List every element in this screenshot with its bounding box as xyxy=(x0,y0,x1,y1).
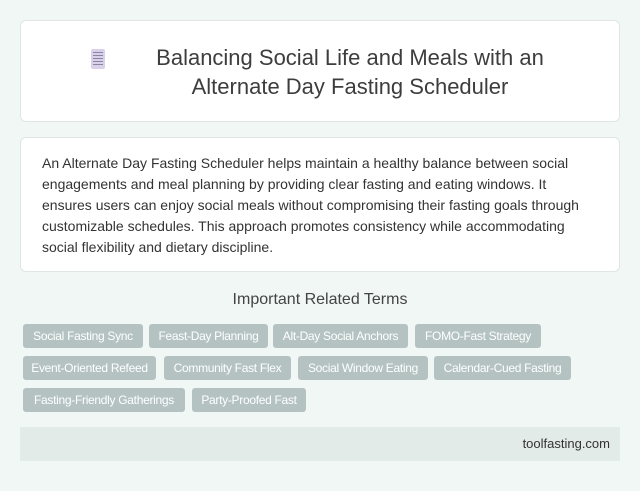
tags: Social Fasting Sync xyxy=(33,329,133,343)
icon: document xyxy=(91,49,105,69)
description panel xyxy=(20,137,620,272)
footer text: toolfasting.com xyxy=(523,436,610,451)
tags: Calendar-Cued Fasting xyxy=(444,361,561,375)
tags: Social Window Eating xyxy=(308,361,418,375)
tags: Feast-Day Planning xyxy=(158,329,258,343)
header panel xyxy=(20,20,620,122)
title: Balancing Social Life and Meals with an Alternate Day Fasting Scheduler xyxy=(156,45,544,99)
description text: An Alternate Day Fasting Scheduler helps maintain a healthy balance between social engagements and meal planning by providing clear fasting and eating windows. It ensures users can enjoy social meals without compromising their fasting goals through customizable schedules. This approach promotes consistency while accommodating social flexibility and dietary discipline. xyxy=(42,155,579,255)
footer xyxy=(20,427,620,461)
tags: Community Fast Flex xyxy=(174,361,281,375)
tags: Fasting-Friendly Gatherings xyxy=(34,393,174,407)
heading: related terms: Important Related Terms xyxy=(233,291,407,308)
tags: Event-Oriented Refeed xyxy=(31,361,148,375)
tags: Alt-Day Social Anchors xyxy=(283,329,398,343)
tags: Party-Proofed Fast xyxy=(201,393,297,407)
tags: FOMO-Fast Strategy xyxy=(425,329,531,343)
